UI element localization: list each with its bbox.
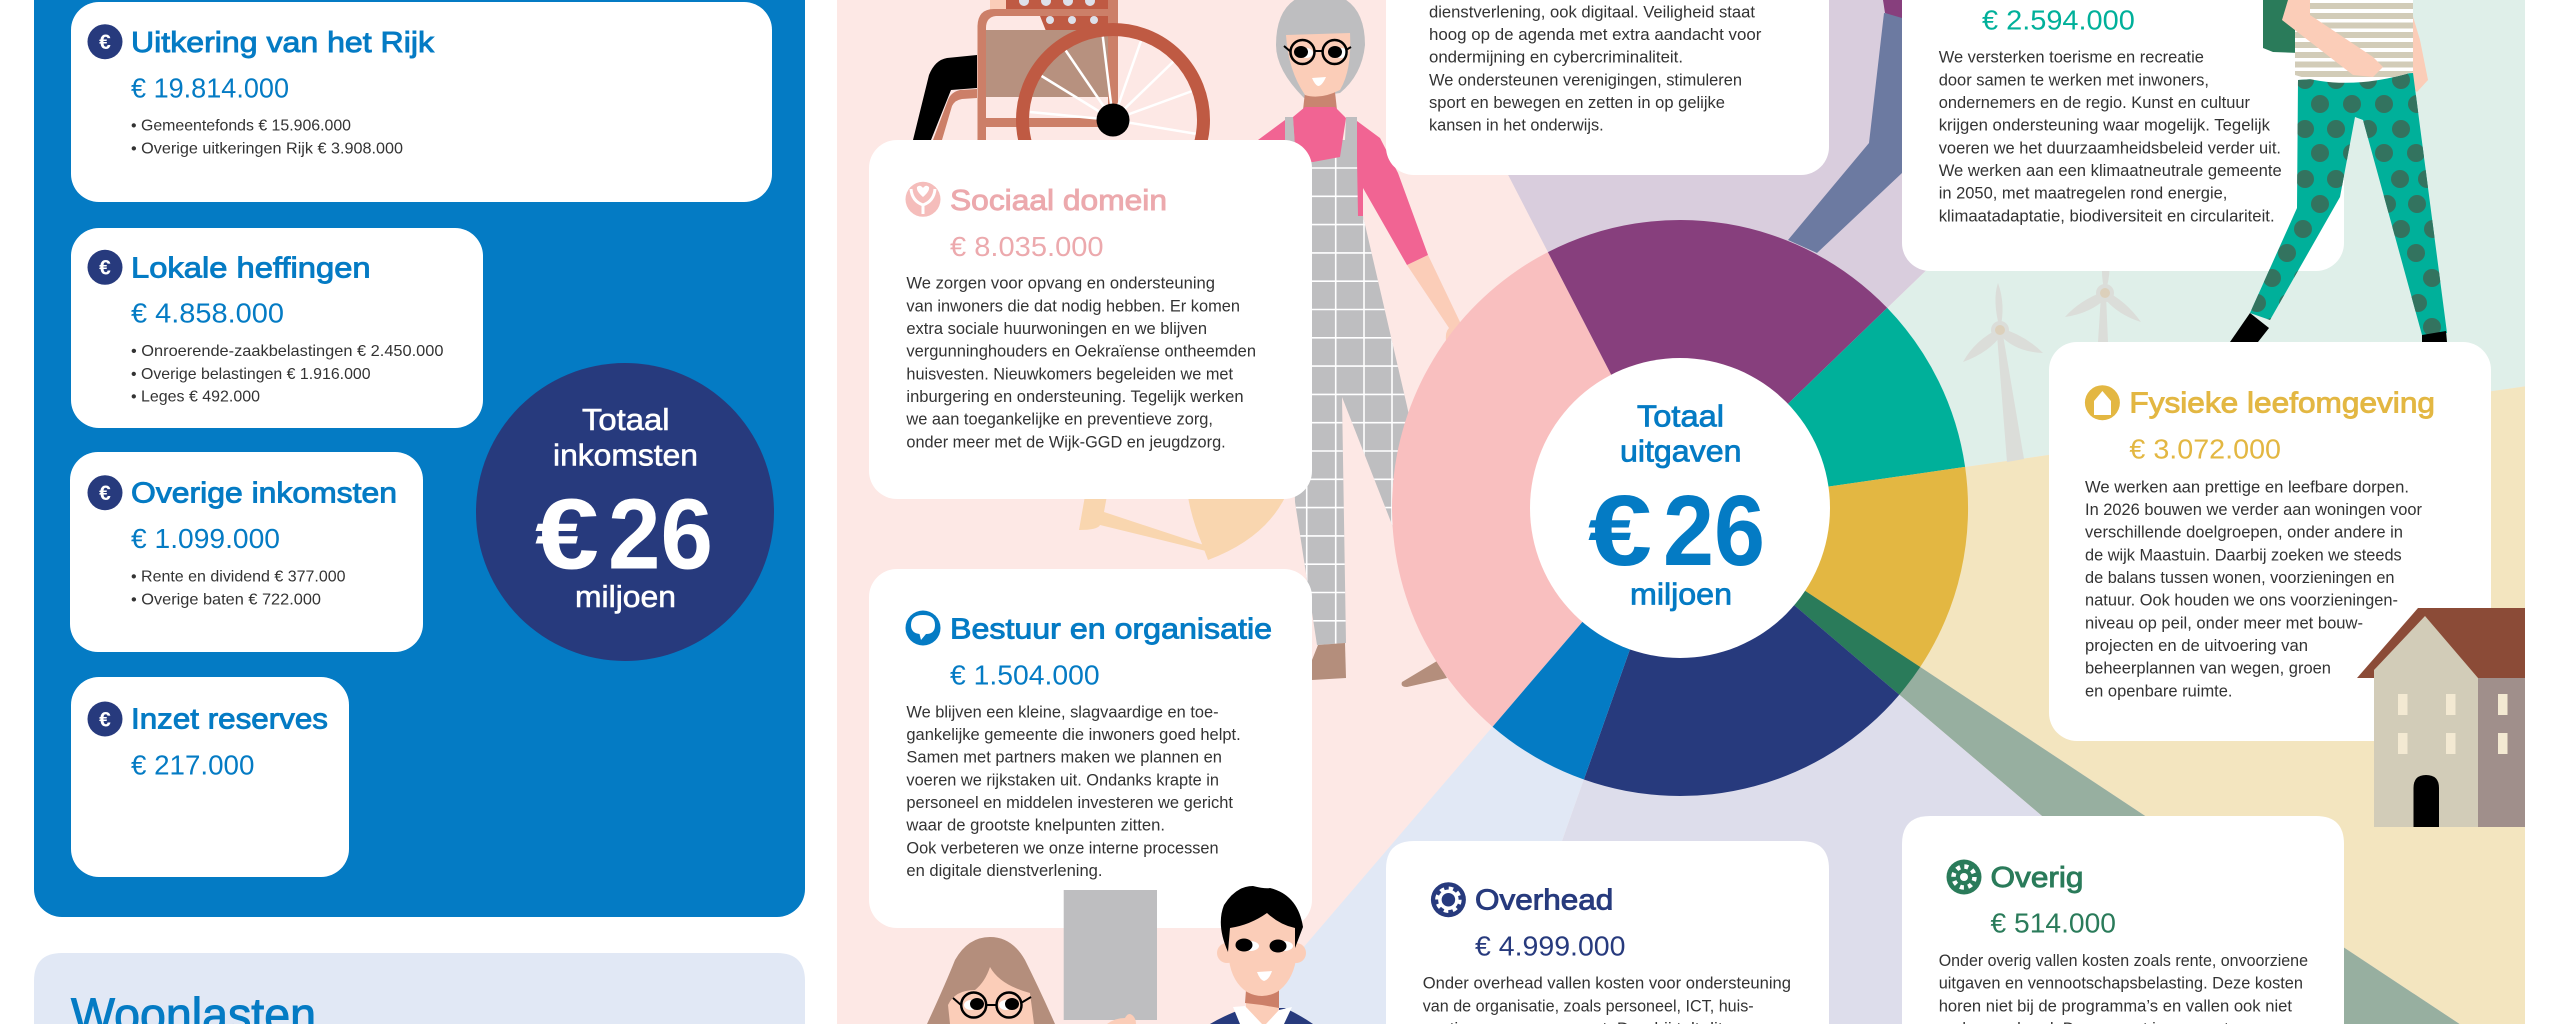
body text: Ook verbeteren we onze interne processen <box>906 838 1219 857</box>
card: Veiligheid en onderwijs <box>1386 0 1829 175</box>
body text: van de organisatie, zoals personeel, ICT, huis- <box>1423 996 1754 1015</box>
body text: kansen in het onderwijs. <box>1429 116 1604 135</box>
callout: totaal inkomsten <box>476 363 774 661</box>
illustration: woman with glasses <box>927 937 1055 1024</box>
segment: fysieke leefomgeving <box>1680 467 1968 667</box>
callout: totaal uitgaven: € <box>1588 475 1652 587</box>
body text: huisvesten. Nieuwkomers begeleiden we met <box>906 364 1233 383</box>
body text <box>905 702 1241 880</box>
illustration: paper sheet <box>1064 890 1157 1024</box>
list: • Overige baten € 722.000 <box>131 591 321 608</box>
body text: hoog op de agenda met extra aandacht voor <box>1429 25 1762 44</box>
segment: overhead <box>1584 508 1899 796</box>
body text: inburgering en ondersteuning. Tegelijk werken <box>906 387 1244 406</box>
amount: € 19.814.000 <box>131 72 289 103</box>
illustration: house <box>2357 608 2525 827</box>
body text: sport en bewegen en zetten in op gelijke <box>1429 93 1725 112</box>
body text: en digitale dienstverlening. <box>906 861 1102 880</box>
illustration: wind turbines <box>1963 248 2141 462</box>
body text: voeren we het duurzaamheidsbeleid verder uit. <box>1939 138 2281 157</box>
heading: Sociaal domein <box>950 185 1167 217</box>
body text <box>1939 951 2308 1024</box>
body text <box>1939 48 2282 225</box>
segment: veiligheid en onderwijs <box>1548 220 1887 508</box>
amount: € 4.858.000 <box>131 298 284 329</box>
body text: personeel en middelen investeren we gericht <box>906 793 1233 812</box>
heading: Overige inkomsten <box>131 478 397 510</box>
body text: onder meer met de Wijk-GGD en jeugdzorg. <box>906 432 1226 451</box>
body text <box>1423 974 1791 1024</box>
card: Sociaal domein <box>869 140 1312 499</box>
segment: sociaal domein <box>1392 252 1680 727</box>
body text: in 2050, met maatregelen rond energie, <box>1939 184 2227 203</box>
list: • Overige belastingen € 1.916.000 <box>131 366 371 383</box>
body text: Onder overig vallen kosten zoals rente, onvoorziene <box>1939 951 2308 970</box>
body text: ondernemers en de regio. Kunst en cultuur <box>1939 93 2250 112</box>
segment: overig <box>1680 508 1920 695</box>
card: Fysieke leefomgeving <box>2049 342 2491 741</box>
list: • Overige uitkeringen Rijk € 3.908.000 <box>131 140 403 157</box>
body text: en openbare ruimte. <box>2085 681 2232 700</box>
body text: de balans tussen wonen, voorzieningen en <box>2085 568 2394 587</box>
amount: € 3.072.000 <box>2129 433 2281 464</box>
card: Recreatie, cultuur en duurzaamheid <box>1902 0 2344 271</box>
heading: Lokale heffingen <box>131 252 371 284</box>
heading: Fysieke leefomgeving <box>2129 388 2435 420</box>
card: Overig <box>1902 816 2344 1024</box>
list <box>131 569 346 608</box>
body text <box>905 274 1256 451</box>
icon: euro: € <box>99 257 111 280</box>
body text: niveau op peil, onder meer met bouw- <box>2085 613 2363 632</box>
callout: totaal inkomsten: 26 <box>608 479 713 591</box>
icon: euro <box>88 250 122 285</box>
body text: krijgen ondersteuning waar mogelijk. Tegelijk <box>1939 116 2270 135</box>
amount: € 217.000 <box>131 750 254 781</box>
icon: house <box>2085 385 2120 420</box>
callout: totaal inkomsten: miljoen <box>575 579 676 614</box>
illustration: woman with grey hair <box>1258 0 1475 687</box>
body text: We versterken toerisme en recreatie <box>1939 48 2204 67</box>
body text: klimaatadaptatie, biodiversiteit en circulariteit. <box>1939 206 2275 225</box>
body text: vergunninghouders en Oekraïense ontheemden <box>906 342 1256 361</box>
segment: recreatie <box>1680 308 1965 508</box>
background: coloured rays <box>837 0 2525 1024</box>
body text: We ondersteunen verenigingen, stimuleren <box>1429 70 1742 89</box>
body text: Samen met partners maken we plannen en <box>906 748 1222 767</box>
body text: ondermijning en cybercriminaliteit. <box>1429 48 1683 67</box>
card: Bestuur en organisatie <box>869 569 1312 928</box>
amount: € 4.999.000 <box>1475 930 1626 961</box>
illustration: arm behind cards <box>1788 0 1902 253</box>
callout: totaal uitgaven: uitgaven <box>1620 434 1742 469</box>
heading: Bestuur en organisatie <box>950 614 1272 646</box>
heading: Overig <box>1990 862 2084 894</box>
amount: € 1.504.000 <box>950 659 1100 690</box>
body text: we aan toegankelijke en preventieve zorg, <box>905 410 1213 429</box>
body text: de wijk Maastuin. Daarbij zoeken we steeds <box>2085 545 2402 564</box>
body text: We werken aan prettige en leefbare dorpen. <box>2085 477 2409 496</box>
icon: gear <box>1431 882 1466 917</box>
panel: inkomsten <box>34 0 805 917</box>
amount: € 1.099.000 <box>131 523 280 554</box>
body text <box>1429 2 1762 135</box>
icon: flower <box>1946 860 1982 894</box>
body text: extra sociale huurwoningen en we blijven <box>906 319 1207 338</box>
body text: We werken aan een klimaatneutrale gemeente <box>1939 161 2282 180</box>
body text: In 2026 bouwen we verder aan woningen voor <box>2085 500 2422 519</box>
card: Uitkering van het Rijk <box>71 2 772 202</box>
body text: Onder overhead vallen kosten voor ondersteuning <box>1423 974 1791 993</box>
illustration: man with black hair <box>1210 886 1313 1024</box>
callout: totaal uitgaven <box>1530 358 1830 658</box>
list: • Onroerende-zaakbelastingen € 2.450.000 <box>131 343 444 360</box>
illustration: watering can <box>1079 480 1292 560</box>
body text: door samen te werken met inwoners, <box>1939 70 2209 89</box>
body text: dienstverlening, ook digitaal. Veiligheid staat <box>1429 2 1755 21</box>
amount: € 2.594.000 <box>1982 4 2135 35</box>
callout: totaal inkomsten: Totaal <box>582 402 670 437</box>
list <box>131 118 403 157</box>
list: • Leges € 492.000 <box>131 389 260 406</box>
callout: totaal inkomsten: € <box>535 479 599 591</box>
body text: projecten en de uitvoering van <box>2085 636 2308 655</box>
list: • Rente en dividend € 377.000 <box>131 569 346 586</box>
icon: euro: € <box>99 31 111 54</box>
amount: € 514.000 <box>1990 908 2116 939</box>
body text: beheerplannen van wegen, groen <box>2085 659 2331 678</box>
callout: totaal inkomsten: inkomsten <box>553 438 698 473</box>
icon: euro <box>88 475 122 510</box>
callout: totaal uitgaven: Totaal <box>1637 399 1724 434</box>
body text: voeren we rijkstaken uit. Ondanks krapte in <box>906 770 1219 789</box>
callout: totaal uitgaven: miljoen <box>1630 576 1732 611</box>
icon: speech bubble <box>906 610 940 646</box>
panel: woonlasten <box>34 953 805 1024</box>
callout: totaal uitgaven: 26 <box>1663 475 1765 587</box>
heading: Uitkering van het Rijk <box>131 27 435 59</box>
body text: We blijven een kleine, slagvaardige en toe- <box>906 702 1219 721</box>
illustration: hiker with backpack <box>2230 0 2447 342</box>
icon: euro: € <box>99 708 111 731</box>
list <box>131 343 444 406</box>
body text: waar de grootste knelpunten zitten. <box>905 816 1165 835</box>
segment: bestuur en organisatie <box>1493 508 1680 780</box>
icon: euro <box>88 702 122 736</box>
body text: We zorgen voor opvang en ondersteuning <box>906 274 1215 293</box>
chart: uitgaven donut <box>1392 220 1968 796</box>
icon: euro <box>88 24 122 59</box>
list: • Gemeentefonds € 15.906.000 <box>131 118 351 135</box>
card: Lokale heffingen <box>71 228 483 428</box>
heading: Inzet reserves <box>131 704 328 736</box>
body text: horen niet bij de programma’s en vallen ook niet <box>1939 996 2292 1015</box>
body text: van inwoners die dat nodig hebben. Er komen <box>906 296 1240 315</box>
body text: natuur. Ook houden we ons voorzieningen- <box>2085 591 2398 610</box>
amount: € 8.035.000 <box>950 231 1104 262</box>
body text: verschillende doelgroepen, onder andere in <box>2085 523 2403 542</box>
card: Overhead <box>1386 841 1829 1024</box>
icon: hands with heart <box>906 182 940 217</box>
card: Inzet reserves <box>71 677 349 877</box>
heading: Overhead <box>1475 884 1613 916</box>
card: Overige inkomsten <box>70 452 423 652</box>
body text <box>2085 477 2422 700</box>
illustration: wheelchair <box>913 0 1210 140</box>
body text: uitgaven en vennootschapsbelasting. Deze kosten <box>1939 974 2303 993</box>
body text: gankelijke gemeente die inwoners goed helpt. <box>906 725 1241 744</box>
icon: euro: € <box>99 482 111 505</box>
